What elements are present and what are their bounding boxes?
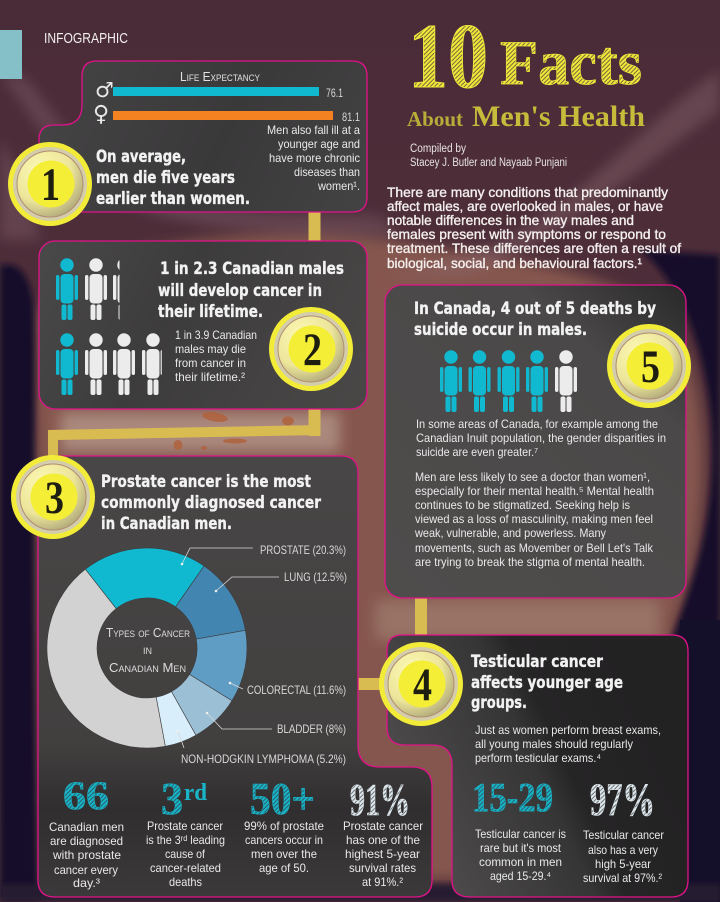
- stat: 3rd: is the 3ʳᵈ leading: [146, 833, 225, 847]
- heading: their lifetime.: [158, 302, 263, 321]
- stat: 91%: 91%: [350, 774, 410, 825]
- paragraph: stigma: especially for their mental health.⁵ Mental health: [415, 484, 654, 498]
- heading: will develop cancer in: [158, 281, 322, 300]
- donut centre label: in: [143, 642, 152, 657]
- title: [407, 5, 645, 133]
- badge 5: 5: [641, 341, 660, 393]
- section label: INFOGRAPHIC: INFOGRAPHIC: [44, 30, 128, 47]
- heading: men die five years: [96, 168, 235, 187]
- stat: 3rd: Prostate cancer: [147, 819, 223, 833]
- heading: in Canadian men.: [101, 514, 232, 533]
- stat: 66: 66: [63, 773, 109, 818]
- stat: 50+: 50+: [250, 774, 315, 824]
- chart heading: Life Expectancy: [180, 69, 260, 84]
- segment: non-Hodgkin lymphoma: [156, 692, 196, 746]
- badge 2: 2: [303, 324, 322, 376]
- heading: Testicular cancer: [471, 652, 604, 671]
- donut centre label: [106, 625, 190, 675]
- title word: Facts: Facts: [500, 27, 642, 98]
- byline: [410, 143, 567, 169]
- value: female: 81.1: [342, 110, 360, 124]
- introduction text: treatment. These differences are often a result of: [387, 240, 681, 256]
- introduction text: affect males, are overlooked in males, or have: [387, 198, 663, 214]
- mortality note: 1 in 3.9 Canadian: [175, 328, 257, 342]
- stat: 97%: [583, 774, 664, 885]
- paragraph: gender disparities: Canadian Inuit population, the gender disparities in: [416, 431, 666, 445]
- introduction text: There are many conditions that predominantly: [387, 184, 668, 200]
- heading: [96, 147, 250, 208]
- stat: 3rd: cause of: [165, 847, 206, 861]
- stat: 66: day.³: [73, 876, 100, 890]
- paragraph: stigma: weak, vulnerable, and powerless. Many: [414, 526, 606, 540]
- stat: 91%: survival rates: [349, 861, 416, 875]
- chart labels: PROSTATE (20.3%): [260, 543, 346, 557]
- stat: 97%: high 5-year: [595, 857, 651, 871]
- side note: [267, 123, 360, 193]
- mortality note: their lifetime.²: [175, 370, 245, 384]
- paragraph: stigma: continues to be stigmatized. Seeking help is: [415, 498, 630, 512]
- badge 1: 1: [41, 159, 60, 211]
- heading: [101, 472, 322, 533]
- byline: Stacey J. Butler and Nayaab Punjani: [410, 157, 567, 169]
- body text: Just as women perform breast exams,: [475, 723, 661, 737]
- subtitle: About: About: [407, 107, 463, 131]
- stat: 15-29: Testicular cancer is: [475, 827, 566, 841]
- stat: 15-29: aged 15-29.⁴: [490, 869, 551, 883]
- heading: suicide occur in males.: [414, 320, 587, 339]
- donut centre label: Types of Cancer: [106, 625, 190, 640]
- introduction text: biological, social, and behavioural factors.¹: [387, 255, 642, 271]
- heading: earlier than women.: [96, 189, 250, 208]
- paragraph: stigma: viewed as a loss of masculinity, making men feel: [415, 512, 653, 526]
- stat: 91%: highest 5-year: [345, 847, 420, 861]
- donut chart: [47, 548, 247, 748]
- value: male: 76.1: [326, 86, 343, 100]
- mortality note: [175, 328, 257, 384]
- segment: lung: [176, 566, 245, 639]
- side note: diseases than: [294, 165, 360, 179]
- segment: bladder: [172, 674, 232, 735]
- stat: 66: cancer every: [54, 863, 118, 877]
- leader lines: [178, 548, 279, 748]
- icon: female symbol: ♀: [93, 102, 109, 127]
- stat: 91%: has one of the: [346, 833, 420, 847]
- stat: 66: with prostate: [52, 848, 121, 862]
- title numeral: 10: 10: [408, 5, 488, 107]
- heading: groups.: [471, 693, 527, 712]
- stat: 66: are diagnosed: [50, 834, 123, 848]
- chart labels: COLORECTAL (11.6%): [247, 683, 346, 697]
- stat: 66: [49, 773, 124, 890]
- chart labels: BLADDER (8%): [277, 722, 346, 736]
- people row: 1 in 2.3: [56, 258, 120, 320]
- paragraph: stigma: are trying to break the stigma of mental health.: [415, 555, 645, 569]
- stat: 15-29: common in men: [479, 855, 562, 869]
- bar: male life expectancy: [113, 87, 319, 96]
- heading: commonly diagnosed cancer: [101, 493, 322, 512]
- heading: [414, 299, 656, 339]
- stat: 3rd: deaths: [169, 875, 202, 889]
- segment: colorectal: [190, 630, 247, 701]
- heading: On average,: [96, 147, 186, 166]
- paragraph: stigma: [414, 470, 654, 569]
- heading: Prostate cancer is the most: [101, 472, 311, 491]
- stat: 15-29: rare but it's most: [480, 841, 562, 855]
- body text: perform testicular exams.⁴: [475, 751, 601, 765]
- paragraph: stigma: Men are less likely to see a doctor than women¹,: [415, 470, 650, 484]
- paragraph: gender disparities: suicide are even greater.⁷: [416, 445, 538, 459]
- panel 4: testicular cancer: [379, 635, 688, 897]
- badge 4: [379, 642, 463, 726]
- stat: 97%: survival at 97%.²: [583, 871, 662, 885]
- badge 1: [8, 142, 92, 226]
- connector lines: [48, 212, 427, 690]
- introduction text: females present with symptoms or respond to: [387, 226, 666, 242]
- icon: male symbol: ♂: [95, 78, 114, 102]
- stat: 3rd: rd: [184, 780, 208, 806]
- paragraph: gender disparities: In some areas of Canada, for example among the: [416, 417, 658, 431]
- segment: other: [47, 569, 165, 748]
- heading: [471, 652, 623, 712]
- badge 3: 3: [45, 472, 64, 524]
- people row: 1 in 3.9: [56, 333, 164, 395]
- side note: younger age and: [278, 137, 360, 151]
- mortality note: males may die: [175, 342, 246, 356]
- stat: 15-29: [472, 774, 566, 883]
- badge 4: 4: [413, 659, 432, 711]
- paragraph: stigma: movements, such as Movember or Bell Let's Talk: [415, 541, 654, 555]
- heading: 1 in 2.3 Canadian males: [160, 259, 344, 278]
- stat: 97%: also has a very: [588, 843, 658, 857]
- donut centre label: Canadian Men: [109, 660, 186, 675]
- heading: In Canada, 4 out of 5 deaths by: [414, 299, 656, 318]
- heading: [158, 259, 344, 321]
- stat: 91%: at 91%.²: [362, 875, 403, 889]
- stat: 50+: [244, 774, 324, 875]
- stat: 91%: [343, 774, 423, 889]
- panel 2: cancer incidence: [39, 241, 367, 409]
- mortality note: from cancer in: [175, 356, 246, 370]
- stat: 3rd: 3: [161, 774, 183, 824]
- stat: 50+: men over the: [251, 847, 317, 861]
- leader dots: [177, 563, 231, 732]
- people row: 4 out of 5: [440, 350, 577, 412]
- byline: Compiled by: [410, 143, 466, 155]
- heading: affects younger age: [471, 673, 623, 692]
- stat: 3rd: cancer-related: [150, 861, 221, 875]
- bar: female life expectancy: [113, 111, 333, 120]
- panel 3: prostate cancer: [11, 455, 432, 897]
- stat: 50+: cancers occur in: [245, 833, 323, 847]
- segment: prostate: [85, 548, 204, 609]
- side note: have more chronic: [269, 151, 360, 165]
- panel 1: life expectancy: [8, 61, 367, 226]
- stat: 50+: age of 50.: [259, 861, 309, 875]
- stat: 66: Canadian men: [49, 820, 124, 834]
- badge 2: [269, 307, 353, 391]
- side note: women¹.: [317, 179, 360, 193]
- subtitle: Men's Health: Men's Health: [472, 100, 645, 133]
- stat: 97%: 97%: [590, 774, 655, 826]
- chart labels: LUNG (12.5%): [284, 570, 347, 584]
- panel 5: suicide and mental health: [385, 285, 691, 598]
- introduction text: notable differences in the way males and: [387, 212, 634, 228]
- stat: 15-29: 15-29: [472, 774, 553, 820]
- teal corner tab: [0, 30, 22, 79]
- body text: all young males should regularly: [475, 737, 633, 751]
- stat: 91%: Prostate cancer: [343, 819, 423, 833]
- paragraph: gender disparities: [416, 417, 666, 459]
- chart labels: [181, 543, 347, 766]
- stat: 97%: Testicular cancer: [583, 828, 664, 842]
- body text: [475, 723, 661, 765]
- introduction text: [387, 184, 681, 271]
- badge 3: [11, 455, 95, 539]
- badge 5: [607, 324, 691, 408]
- chart labels: NON-HODGKIN LYMPHOMA (5.2%): [181, 752, 346, 766]
- side note: Men also fall ill at a: [267, 123, 360, 137]
- stat: 50+: 99% of prostate: [244, 819, 324, 833]
- stat: 3rd: [146, 774, 225, 889]
